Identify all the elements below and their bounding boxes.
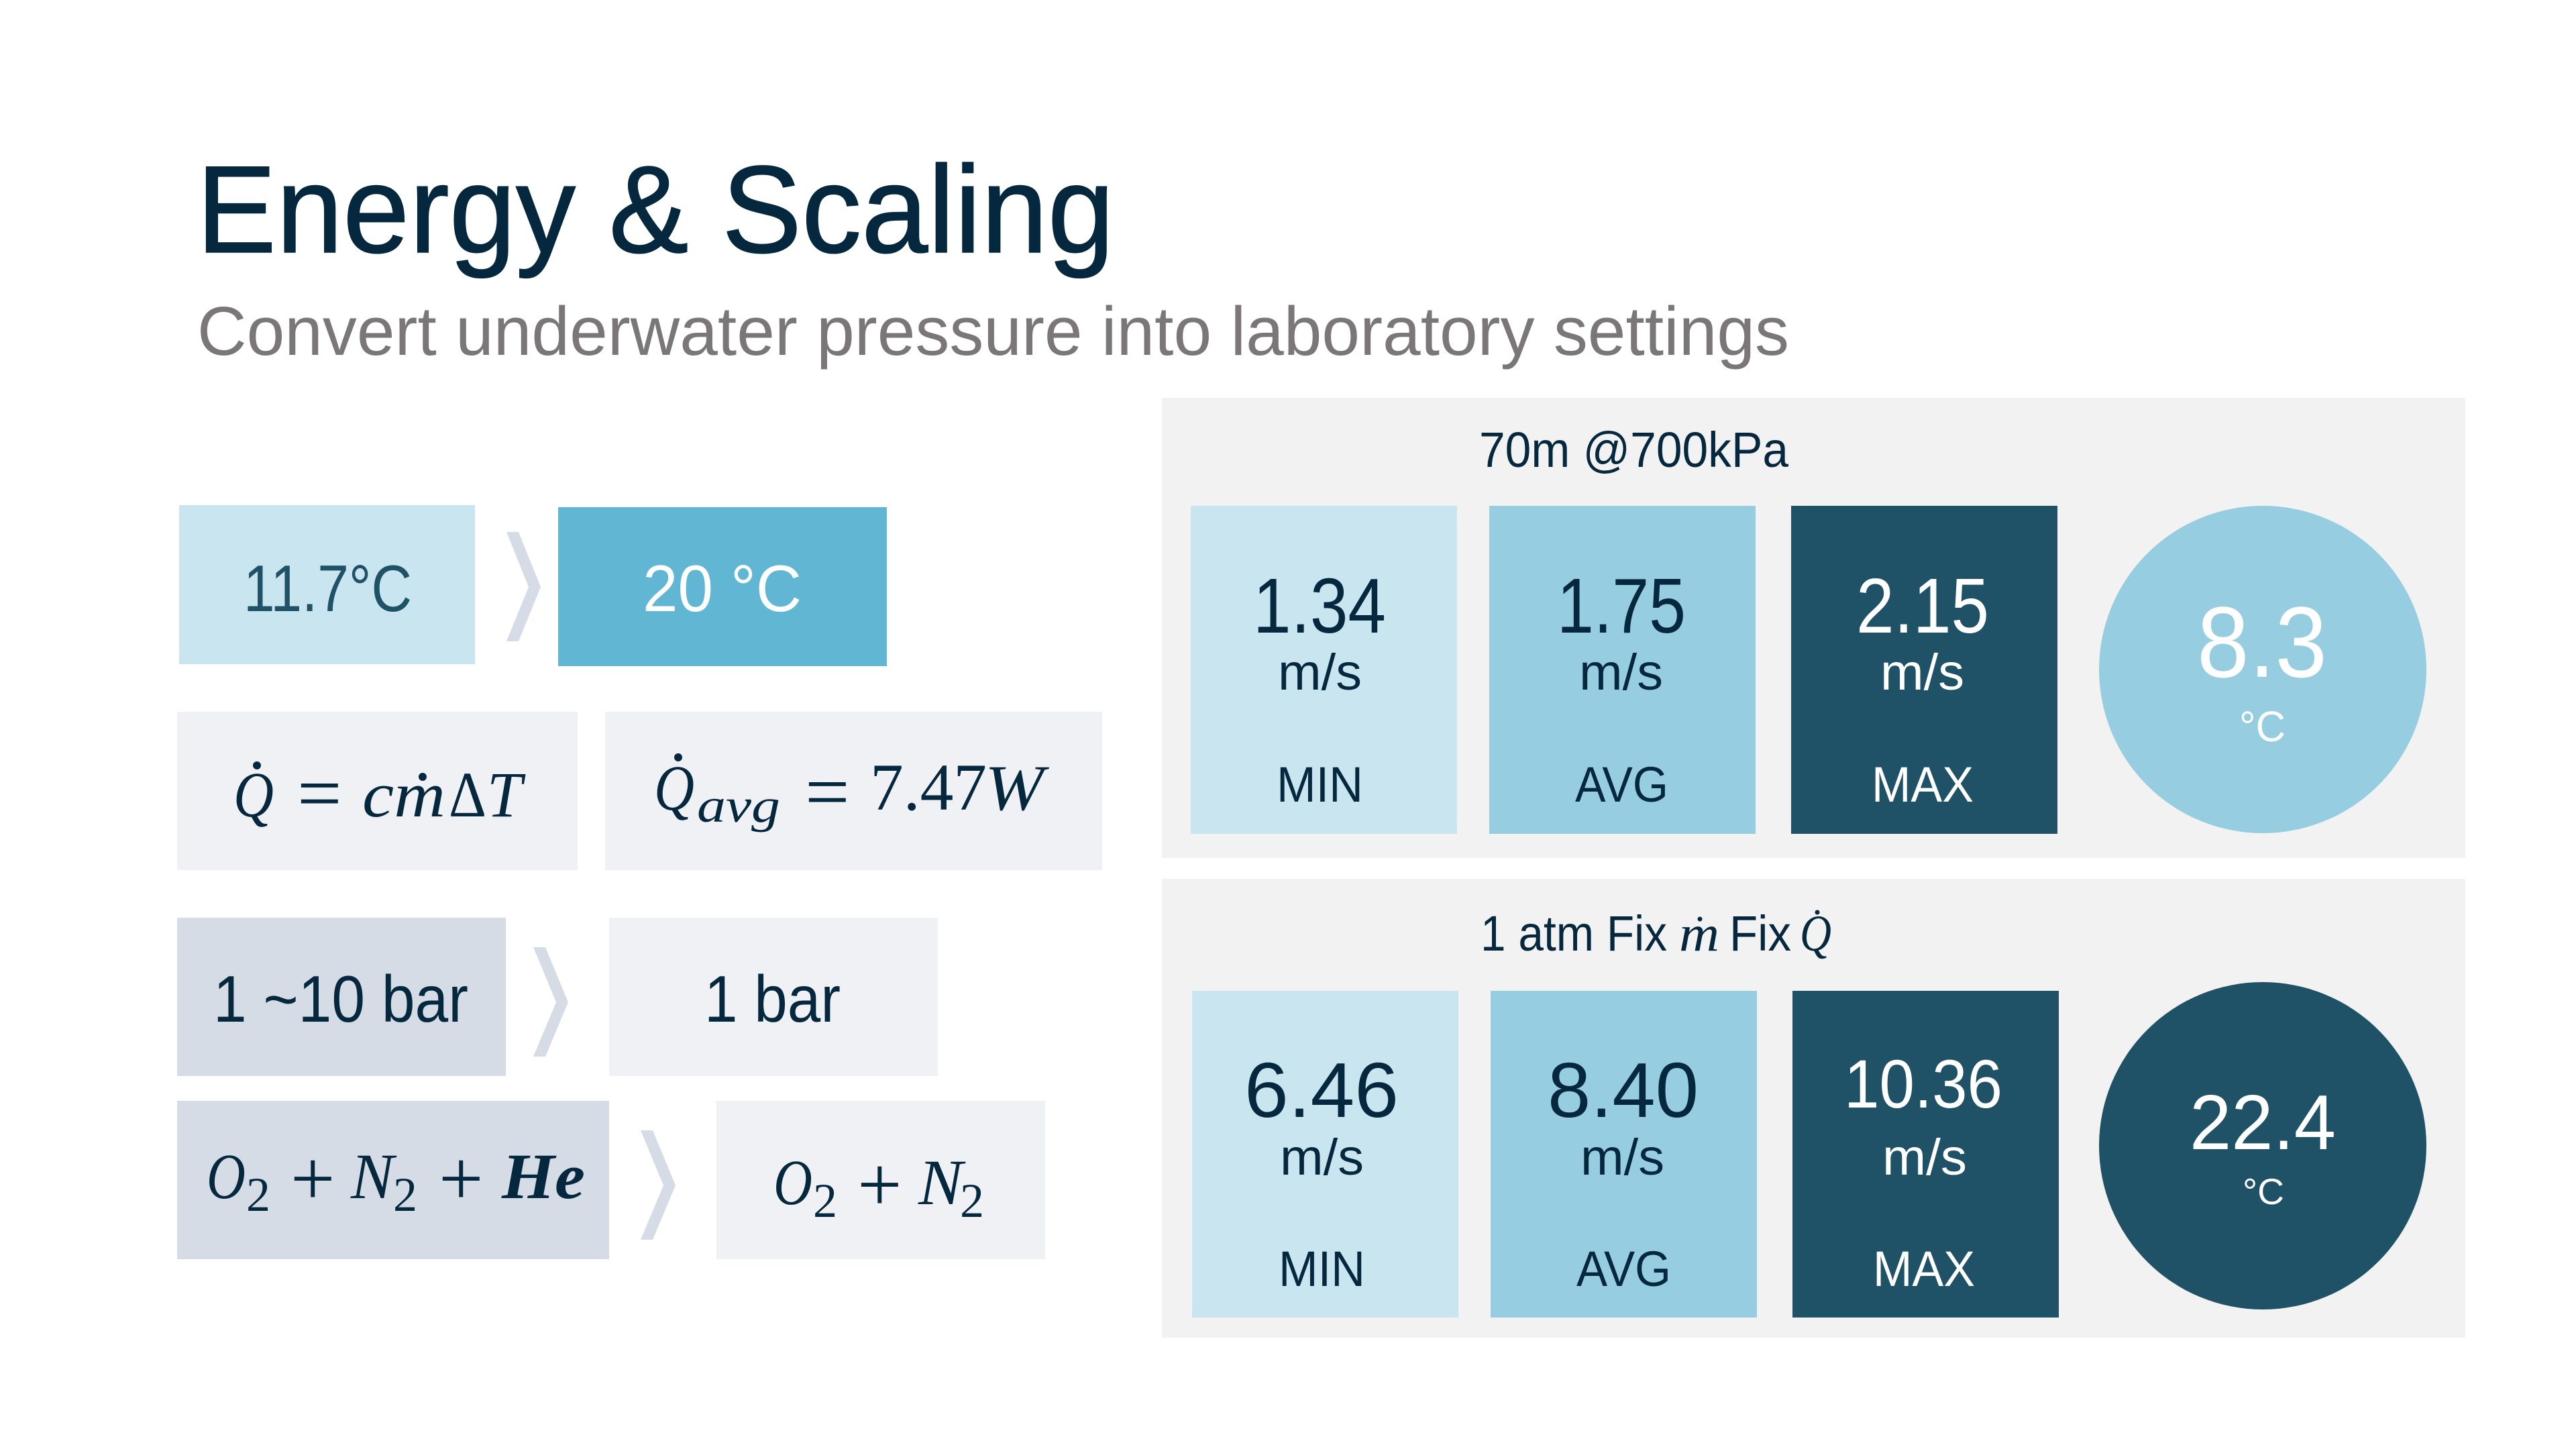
panel: 1 atm fixed flow (1162, 879, 2465, 1338)
box: heat equation: Q (233, 759, 274, 830)
box: 1 to 10 bar: 1 ~10 bar (213, 962, 468, 1036)
box: average heat (605, 712, 1102, 870)
box: nitrox: N (918, 1146, 966, 1218)
circle: 8.3 C (2099, 506, 2426, 833)
box: 1 bar: 1 bar (704, 962, 841, 1036)
card: max: MAX (1872, 757, 1974, 812)
card: avg: 8.40 (1548, 1046, 1699, 1134)
box: average heat: W (985, 752, 1050, 824)
panel heading: 70m @700kPa (1479, 422, 1789, 478)
card: min: m/s (1278, 644, 1362, 701)
box: heat equation: T (487, 759, 526, 830)
circle: 22.4 C (2099, 982, 2426, 1309)
card: max (1791, 506, 2057, 834)
card: min: MIN (1277, 757, 1363, 812)
card: max: m/s (1882, 1129, 1967, 1186)
box: nitrox (716, 1101, 1045, 1259)
card: max: 2.15 (1856, 562, 1989, 649)
box: average heat: 7.47 (870, 750, 987, 824)
box: average heat: = (805, 748, 850, 836)
card: max (1792, 991, 2059, 1318)
panel heading: 1 atm Fix (1481, 906, 1667, 961)
card: max: 10.36 (1844, 1046, 2002, 1122)
panel heading: Fix (1729, 906, 1791, 961)
box: nitrox: 2 (813, 1174, 837, 1228)
card: avg: m/s (1579, 644, 1663, 701)
arrow: temperature (506, 532, 541, 641)
panel: temperature conversion (179, 505, 887, 666)
circle: 8.3 C: °C (2239, 702, 2286, 751)
box: 1 to 10 bar (177, 918, 506, 1076)
box: 20 C: 20 °C (643, 551, 802, 625)
box: heat equation (177, 712, 578, 870)
box: 11.7 C: 11.7°C (244, 551, 412, 625)
card: min: MIN (1279, 1241, 1365, 1297)
card: avg: AVG (1575, 757, 1668, 812)
box: average heat: Q (654, 752, 694, 824)
box: trimix: N (350, 1140, 397, 1212)
box: 1 bar (609, 918, 938, 1076)
box: heat equation: cm (362, 759, 445, 830)
card: min: m/s (1280, 1129, 1364, 1186)
panel: 70m at 700kPa (1162, 398, 2465, 858)
box: trimix: O (207, 1140, 246, 1212)
arrow: gas (641, 1130, 676, 1240)
box: trimix: + (290, 1134, 335, 1222)
box: trimix: 2 (393, 1168, 417, 1222)
box: trimix: 2 (246, 1168, 270, 1222)
card: min (1191, 506, 1457, 834)
box: 20 C (558, 507, 887, 666)
panel: heat equation (177, 712, 1102, 870)
box: heat equation: = (297, 749, 342, 837)
panel: pressure conversion (177, 918, 938, 1076)
box: nitrox: + (857, 1140, 902, 1228)
panel: gas mixture (177, 1101, 1045, 1259)
box: trimix (177, 1101, 609, 1259)
circle: 22.4 C: °C (2243, 1171, 2284, 1212)
circle: 8.3 C: 8.3 (2197, 586, 2327, 698)
panel heading: m (1679, 906, 1719, 962)
card: min: 6.46 (1244, 1046, 1399, 1134)
box: trimix: + (439, 1134, 484, 1222)
circle: 22.4 C: 22.4 (2190, 1079, 2336, 1166)
card: avg: 1.75 (1557, 562, 1686, 649)
card: avg (1489, 506, 1756, 834)
card: avg: m/s (1580, 1129, 1664, 1186)
box: nitrox: 2 (960, 1174, 984, 1228)
panel heading (1481, 906, 1831, 962)
subtitle: Convert underwater pressure into laboratory settings (197, 292, 1789, 370)
arrow: pressure (533, 947, 568, 1057)
card: max: MAX (1873, 1241, 1975, 1297)
title: Energy & Scaling (197, 141, 1114, 279)
card: avg: AVG (1576, 1241, 1671, 1297)
box: 11.7 C (179, 505, 475, 664)
panel heading: Q (1800, 906, 1831, 962)
card: max: m/s (1880, 644, 1964, 701)
box: trimix: He (501, 1140, 585, 1212)
card: avg (1491, 991, 1757, 1318)
box: heat equation: Δ (449, 759, 486, 830)
card: min: 1.34 (1253, 562, 1386, 649)
card: min (1192, 991, 1458, 1318)
box: average heat: avg (697, 779, 780, 833)
box: nitrox: O (773, 1146, 812, 1218)
